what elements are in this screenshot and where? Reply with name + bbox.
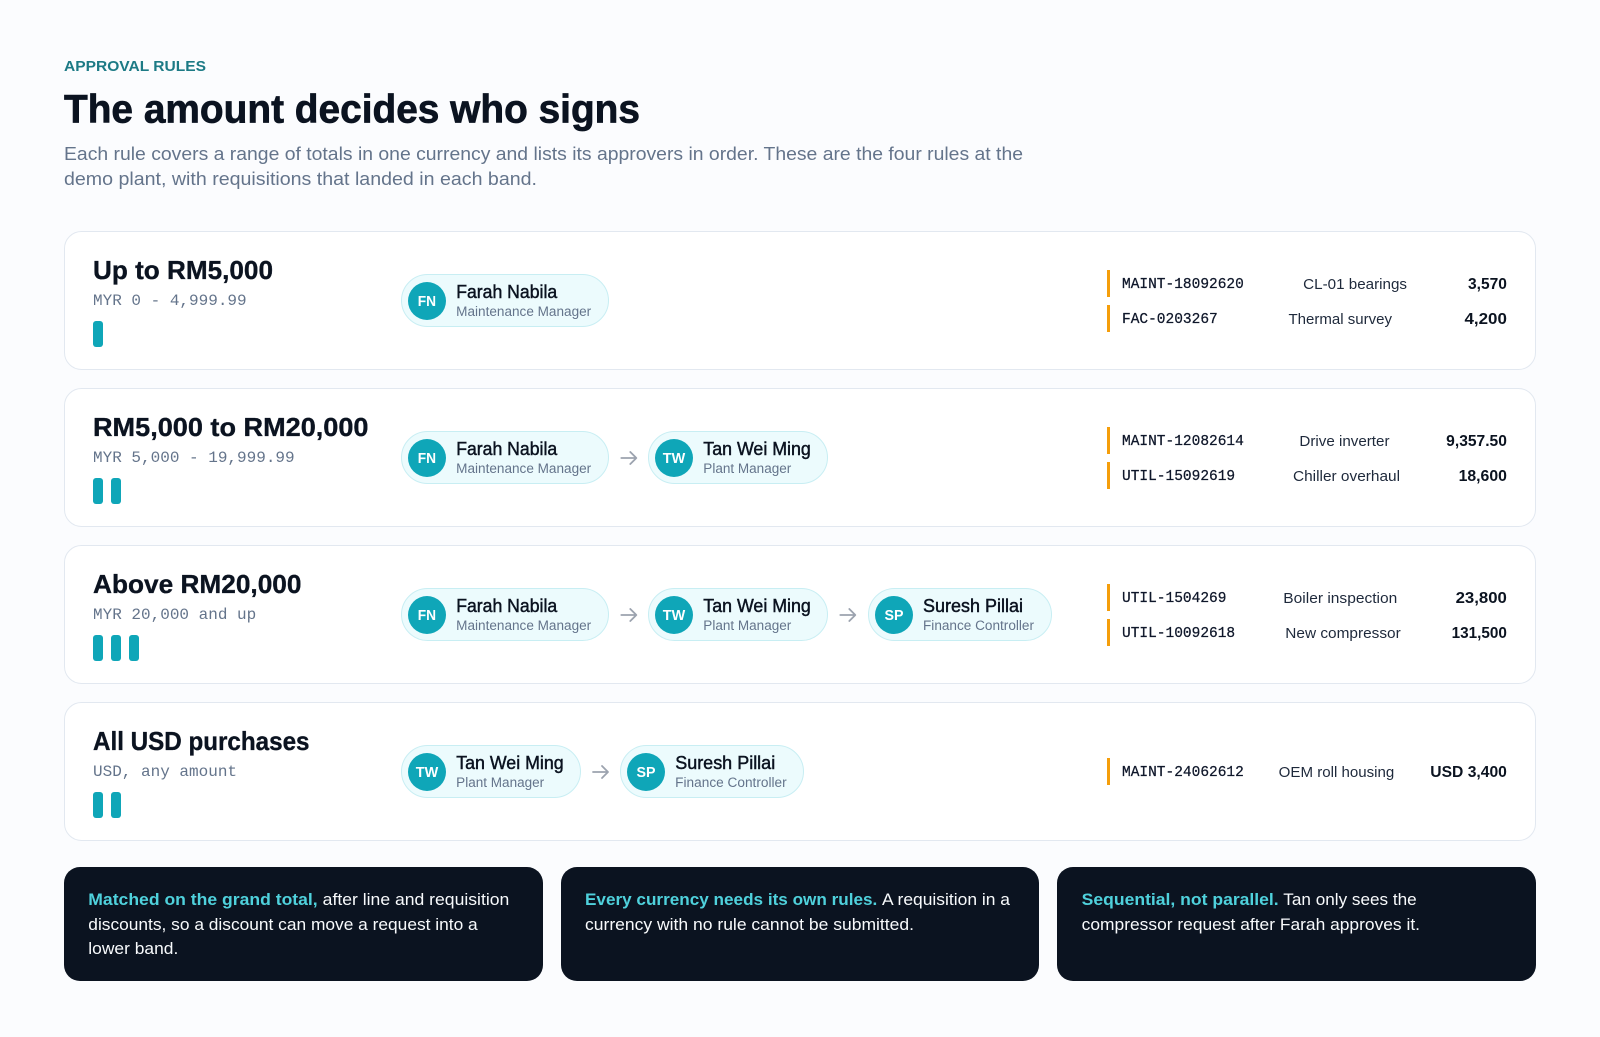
subtitle: demo plant, with requisitions that landed in each band. xyxy=(64,168,537,189)
approver: Tan Wei Ming: TW xyxy=(663,607,686,624)
requisition: MAINT-24062612 xyxy=(1107,758,1507,785)
requisition: FAC-0203267 xyxy=(1107,305,1507,332)
arrow xyxy=(840,609,855,621)
approver: Tan Wei Ming xyxy=(648,432,828,484)
rule heading: All USD purchases xyxy=(93,726,310,756)
approver: Tan Wei Ming: Tan Wei Ming xyxy=(703,596,811,616)
subtitle: Each rule covers a range of totals in one currency and lists its approvers in order. These are the four rules at the xyxy=(64,143,1023,164)
approver: Farah Nabila: Farah Nabila xyxy=(456,439,558,459)
approver count bars xyxy=(93,792,121,818)
panel: rule all USD purchases xyxy=(64,702,1536,840)
requisition: MAINT-12082614: MAINT-12082614 xyxy=(1122,434,1244,450)
approver: Suresh Pillai: Suresh Pillai xyxy=(923,596,1023,616)
approver: Farah Nabila: FN xyxy=(418,293,436,310)
approver: Tan Wei Ming: Plant Manager xyxy=(703,461,792,476)
panel: rule above RM20,000 xyxy=(64,546,1536,684)
callout: currency rules: currency with no rule cannot be submitted. xyxy=(585,915,914,934)
rule heading: RM5,000 to RM20,000 xyxy=(93,412,368,442)
title: The amount decides who signs xyxy=(64,87,640,131)
approver: Tan Wei Ming: Tan Wei Ming xyxy=(456,753,564,773)
rule range: MYR 0 - 4,999.99 xyxy=(93,292,247,310)
approver: Farah Nabila: Maintenance Manager xyxy=(456,461,592,476)
panel: rule RM5,000 to RM20,000 xyxy=(64,388,1536,526)
callout: currency rules: Every currency needs its own rules. xyxy=(585,890,877,909)
approver: Tan Wei Ming: Plant Manager xyxy=(456,775,545,790)
approver: Suresh Pillai: Finance Controller xyxy=(923,618,1034,633)
approver: Farah Nabila: Farah Nabila xyxy=(456,282,558,302)
callout: grand total: lower band. xyxy=(88,939,178,958)
approver: Tan Wei Ming: Plant Manager xyxy=(703,618,792,633)
requisition: UTIL-15092619: 18,600 xyxy=(1459,468,1507,485)
requisition: MAINT-12082614: Drive inverter xyxy=(1299,433,1390,450)
approver: Suresh Pillai: Suresh Pillai xyxy=(675,753,775,773)
requisition: UTIL-1504269 xyxy=(1107,584,1507,611)
panel: rule up to RM5,000 xyxy=(64,232,1536,370)
approver: Farah Nabila xyxy=(402,588,608,640)
requisition: FAC-0203267: 4,200 xyxy=(1464,311,1507,328)
requisition: MAINT-24062612: MAINT-24062612 xyxy=(1122,765,1244,781)
approver: Tan Wei Ming xyxy=(402,746,580,798)
rule range: MYR 5,000 - 19,999.99 xyxy=(93,449,295,467)
approver: Tan Wei Ming: TW xyxy=(663,450,686,467)
requisition: UTIL-10092618: New compressor xyxy=(1285,625,1401,642)
callout: sequential approvals xyxy=(1057,867,1536,981)
approver: Farah Nabila xyxy=(402,274,608,326)
requisition: MAINT-18092620 xyxy=(1107,270,1507,297)
callout: currency rules xyxy=(561,867,1039,981)
requisition: UTIL-10092618: 131,500 xyxy=(1452,625,1507,642)
requisition: MAINT-12082614 xyxy=(1107,427,1507,454)
approver: Suresh Pillai xyxy=(620,746,804,798)
callout: grand total: Matched on the grand total, xyxy=(88,890,318,909)
approver count bars xyxy=(93,635,139,661)
requisition: MAINT-12082614: 9,357.50 xyxy=(1446,433,1507,450)
approver: Tan Wei Ming: Tan Wei Ming xyxy=(703,439,811,459)
requisition: MAINT-18092620: MAINT-18092620 xyxy=(1122,277,1244,293)
requisition: UTIL-1504269: 23,800 xyxy=(1456,590,1507,607)
requisition: UTIL-15092619 xyxy=(1107,462,1507,489)
requisition: UTIL-10092618 xyxy=(1107,619,1507,646)
approver: Tan Wei Ming xyxy=(648,588,828,640)
requisition: MAINT-24062612: USD 3,400 xyxy=(1430,764,1507,781)
requisition: FAC-0203267: FAC-0203267 xyxy=(1122,312,1218,328)
approver: Farah Nabila: FN xyxy=(418,450,436,467)
subtitle xyxy=(64,143,1023,189)
rule range: USD, any amount xyxy=(93,763,237,781)
callout: sequential approvals: Tan only sees the xyxy=(1283,890,1417,909)
approver: Farah Nabila xyxy=(402,432,608,484)
approver: Suresh Pillai: SP xyxy=(636,764,656,781)
requisition: UTIL-1504269: Boiler inspection xyxy=(1283,590,1397,607)
rule heading: Above RM20,000 xyxy=(93,569,302,599)
approver: Suresh Pillai xyxy=(868,588,1052,640)
rule range: MYR 20,000 and up xyxy=(93,606,256,624)
approver: Suresh Pillai: Finance Controller xyxy=(675,775,787,790)
approver: Farah Nabila: Farah Nabila xyxy=(456,596,558,616)
callout: grand total: discounts, so a discount can move a request into a xyxy=(88,915,478,934)
arrow xyxy=(621,452,636,464)
requisition: UTIL-15092619: UTIL-15092619 xyxy=(1122,469,1235,485)
approver: Farah Nabila: Maintenance Manager xyxy=(456,304,592,319)
header xyxy=(64,58,1023,189)
callout: currency rules: A requisition in a xyxy=(882,890,1011,909)
eyebrow: APPROVAL RULES xyxy=(64,58,206,75)
requisition: MAINT-18092620: 3,570 xyxy=(1468,276,1507,293)
requisition: UTIL-10092618: UTIL-10092618 xyxy=(1122,626,1235,642)
approver: Tan Wei Ming: TW xyxy=(416,764,439,781)
callout: grand total: after line and requisition xyxy=(323,890,509,909)
approver count bars xyxy=(93,478,121,504)
rule heading: Up to RM5,000 xyxy=(93,255,273,285)
approver: Suresh Pillai: SP xyxy=(884,607,904,624)
callout: sequential approvals: Sequential, not parallel. xyxy=(1082,890,1279,909)
approver: Farah Nabila: Maintenance Manager xyxy=(456,618,592,633)
requisition: MAINT-24062612: OEM roll housing xyxy=(1279,764,1394,781)
requisition: UTIL-15092619: Chiller overhaul xyxy=(1293,468,1400,485)
requisition: UTIL-1504269: UTIL-1504269 xyxy=(1122,591,1226,607)
arrow xyxy=(593,766,608,778)
approver count bars xyxy=(93,321,103,347)
requisition: MAINT-18092620: CL-01 bearings xyxy=(1303,276,1407,293)
callout: sequential approvals: compressor request after Farah approves it. xyxy=(1082,915,1420,934)
arrow xyxy=(621,609,636,621)
approver: Farah Nabila: FN xyxy=(418,607,436,624)
requisition: FAC-0203267: Thermal survey xyxy=(1288,311,1393,328)
callout: grand total xyxy=(64,867,543,981)
